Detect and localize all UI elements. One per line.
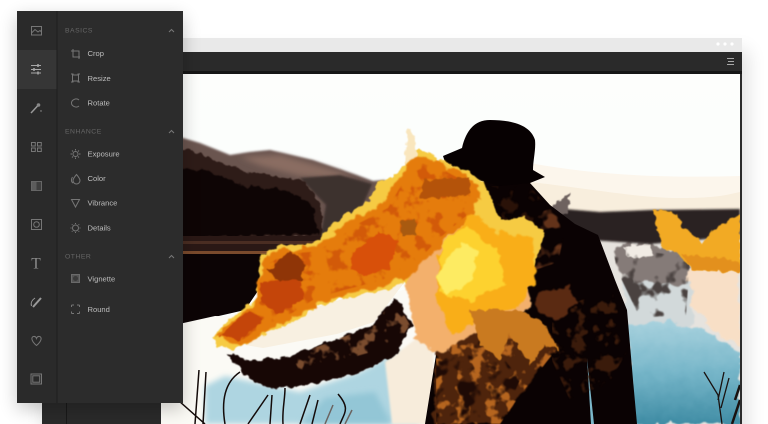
vibrance label: Vibrance (88, 198, 117, 208)
other heading: OTHER (65, 254, 91, 260)
fire hot amber (438, 215, 537, 335)
icon: split square (32, 182, 42, 190)
vibrance icon (72, 200, 80, 207)
details icon (70, 223, 80, 233)
cream shirt reflection (384, 340, 434, 424)
photo (161, 74, 740, 424)
icon: magic wand (31, 103, 42, 113)
pale grey water (622, 280, 695, 328)
section: other (65, 254, 174, 314)
grey reflections (612, 243, 690, 286)
enhance heading: ENHANCE (65, 128, 102, 136)
middle mountain (300, 175, 372, 240)
man body (425, 175, 637, 424)
flame tip pale (405, 128, 418, 165)
icon: sliders (31, 64, 41, 74)
active rail item (17, 50, 56, 89)
dark tree line (552, 208, 740, 244)
icon: vignette square (32, 220, 42, 230)
dark water (183, 254, 267, 324)
far mountains (183, 136, 386, 236)
rotate label: Rotate (88, 98, 110, 108)
basics heading: BASICS (65, 28, 93, 34)
lower flame tongues (470, 310, 560, 365)
section: basics (65, 28, 174, 108)
deeper blue water (300, 392, 392, 424)
pale blue water (205, 350, 420, 424)
rail divider (56, 11, 58, 403)
color icon (71, 174, 80, 184)
hand detail (535, 285, 578, 320)
fire body (212, 128, 560, 424)
lake stripes (183, 236, 322, 251)
grey dark patches (612, 246, 690, 318)
dark forest (183, 168, 320, 236)
fire pale yellow (436, 240, 478, 295)
panel shadow (17, 17, 183, 409)
hat (443, 120, 545, 186)
peach water (684, 262, 740, 345)
blue gap at arm (587, 358, 594, 424)
icon: text T: T (31, 256, 41, 272)
flame plume yellow outline (212, 150, 545, 350)
window light title bar (42, 38, 742, 52)
icon: brush (31, 298, 41, 307)
bright water (183, 316, 218, 325)
exposure label: Exposure (88, 150, 120, 158)
arm highlights (296, 312, 410, 370)
section: enhance (65, 128, 174, 233)
cream horizon bands (532, 164, 740, 198)
plant right (704, 372, 740, 424)
icon: heart (32, 336, 41, 346)
fire plume mottling (222, 162, 472, 340)
distant hill rock (551, 192, 570, 216)
other chevron (169, 256, 174, 258)
fire core red lower (220, 280, 305, 340)
crop label: Crop (88, 49, 104, 58)
fire deep red core (350, 232, 398, 276)
menu icon (727, 58, 734, 64)
rail background (17, 11, 57, 403)
enhance chevron (169, 130, 174, 133)
round label: Round (88, 305, 110, 314)
reeds foreground (161, 370, 352, 424)
right water base (590, 238, 740, 424)
left panel (17, 11, 183, 409)
toolbar lower edge (42, 71, 742, 74)
sky (183, 74, 740, 316)
window controls dots (716, 42, 734, 46)
icon: image (32, 26, 42, 35)
icon: frame (31, 374, 42, 384)
window dark toolbar (42, 52, 742, 424)
left sidebar divider (66, 403, 67, 424)
rotate icon (72, 99, 79, 107)
lower fire mottling copper (436, 310, 556, 424)
photo right border (740, 74, 742, 424)
panel background (17, 11, 183, 403)
distant flame shadow (682, 255, 740, 272)
fire dark upper (420, 177, 470, 198)
brown jacket texture (552, 299, 622, 398)
lower fire mottling dark (436, 340, 520, 424)
icon: grid (32, 142, 41, 152)
details label: Details (88, 224, 111, 232)
fire dark core (268, 250, 305, 285)
face texture (492, 186, 540, 222)
round icon (72, 305, 80, 314)
distant flame (652, 210, 740, 272)
vignette icon (72, 274, 80, 282)
right side landscape (551, 192, 740, 424)
resize label: Resize (88, 74, 111, 83)
lighter mountain highlights (240, 155, 355, 180)
fire bright yellow (440, 225, 505, 300)
fire peach body (405, 222, 530, 355)
exposure icon (70, 149, 80, 159)
fire brown lump (400, 218, 416, 235)
shoulder texture (535, 209, 562, 270)
man silhouette (425, 120, 637, 424)
vignette label: Vignette (88, 274, 115, 284)
resize icon (71, 74, 80, 82)
blue water right (628, 320, 740, 424)
white water glints (622, 244, 654, 258)
forest upper band (183, 148, 324, 236)
fire orange plume (214, 156, 480, 346)
arm shape (226, 297, 412, 389)
color label: Color (88, 174, 106, 183)
extended arm (226, 297, 412, 389)
cream area above arm (245, 279, 407, 348)
icon rail (17, 11, 58, 403)
crop icon (71, 49, 80, 59)
lower body brown base (434, 310, 556, 424)
basics chevron (169, 30, 174, 32)
